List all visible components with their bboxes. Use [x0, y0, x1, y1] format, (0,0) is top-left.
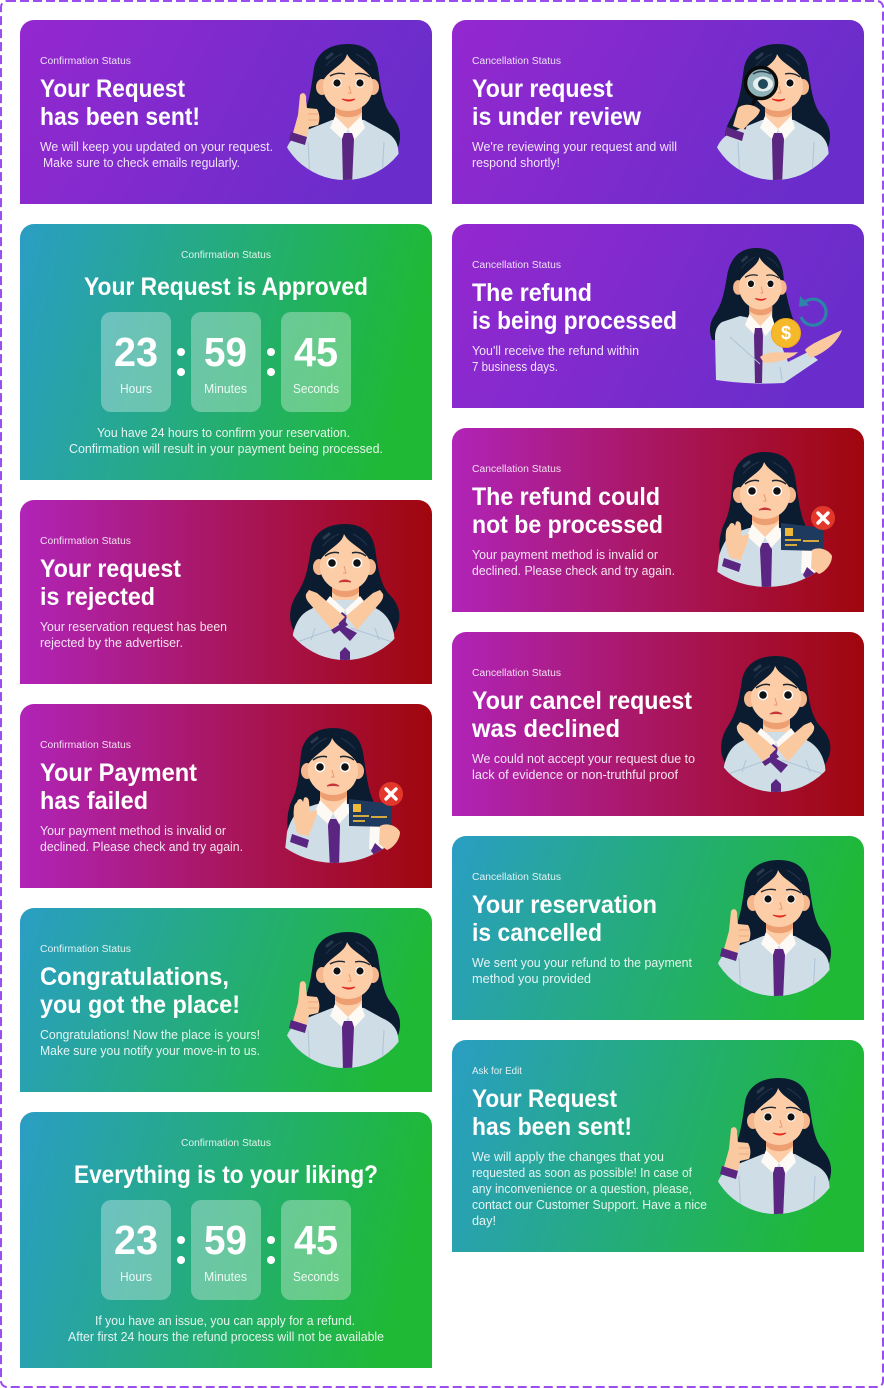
card: ask for edit: requested as soon as possible! In case of: [472, 1166, 692, 1180]
card: request rejected: rejected by the advertiser.: [40, 636, 183, 650]
card: request sent: has been sent!: [40, 103, 200, 131]
card: request approved: Minutes: [204, 382, 247, 396]
card: request rejected: Your reservation request has been: [40, 620, 227, 634]
card: request rejected: is rejected: [40, 583, 155, 611]
card: reservation cancelled: method you provided: [472, 972, 591, 986]
card: under review: Your request: [472, 75, 614, 103]
card: refund processing: You'll receive the refund within: [472, 344, 639, 358]
card: request approved: 23: [114, 329, 158, 375]
card: cancel declined: We could not accept your request due to: [472, 752, 695, 766]
card: request sent: Confirmation Status: [40, 56, 131, 67]
card: request approved: Seconds: [293, 382, 339, 396]
card: request approved: 59: [204, 329, 247, 375]
card: request sent: [20, 20, 432, 204]
card: congratulations: Make sure you notify your move-in to us.: [40, 1044, 260, 1058]
card: payment failed: Your payment method is invalid or: [40, 824, 226, 838]
card: cancel declined: Cancellation Status: [472, 668, 561, 679]
card: reservation cancelled: is cancelled: [472, 919, 602, 947]
card: congratulations: Congratulations! Now the place is yours!: [40, 1028, 260, 1042]
card: everything to your liking: [20, 1112, 432, 1368]
card: congratulations: you got the place!: [40, 991, 240, 1019]
card: everything to your liking: Confirmation Status: [181, 1138, 271, 1149]
card: refund processing: 7 business days.: [472, 360, 558, 374]
card: payment failed: Confirmation Status: [40, 740, 131, 751]
card: ask for edit: We will apply the changes that you: [472, 1150, 664, 1164]
card: reservation cancelled: [452, 836, 864, 1020]
card: request approved: Confirmation will result in your payment being processed.: [69, 442, 383, 456]
card: under review: We're reviewing your request and will: [472, 140, 677, 154]
card: ask for edit: has been sent!: [472, 1113, 632, 1141]
card: refund not processed: Your payment method is invalid or: [472, 548, 658, 562]
card: request sent: We will keep you updated on your request.: [40, 140, 273, 154]
card: everything to your liking: Everything is to your liking?: [74, 1161, 378, 1189]
card: everything to your liking: Hours: [120, 1270, 152, 1284]
card: cancel declined: [452, 632, 864, 816]
card: request approved: Your Request is Approved: [84, 273, 368, 301]
card: refund processing: [452, 224, 864, 408]
card: request sent: Your Request: [40, 75, 186, 103]
card: cancel declined: lack of evidence or non-truthful proof: [472, 768, 679, 782]
card: everything to your liking: If you have an issue, you can apply for a refund.: [95, 1314, 355, 1328]
card: everything to your liking: Seconds: [293, 1270, 339, 1284]
card: request approved: Confirmation Status: [181, 250, 271, 261]
card: cancel declined: was declined: [471, 715, 620, 743]
card: reservation cancelled: Cancellation Status: [472, 872, 561, 883]
card: request approved: You have 24 hours to confirm your reservation.: [97, 426, 350, 440]
card: ask for edit: contact our Customer Support. Have a nice: [472, 1198, 707, 1212]
card: under review: respond shortly!: [472, 156, 560, 170]
card: everything to your liking: 45: [294, 1217, 338, 1263]
card: congratulations: Confirmation Status: [40, 944, 131, 955]
card: payment failed: has failed: [40, 787, 148, 815]
card: payment failed: declined. Please check and try again.: [40, 840, 243, 854]
card: refund processing: Cancellation Status: [472, 260, 561, 271]
card: payment failed: [20, 704, 432, 888]
card: request approved: [20, 224, 432, 480]
card: under review: [452, 20, 864, 204]
card: everything to your liking: 23: [114, 1217, 158, 1263]
card: ask for edit: Your Request: [472, 1085, 618, 1113]
card: ask for edit: Ask for Edit: [472, 1066, 522, 1077]
card: everything to your liking: Minutes: [204, 1270, 247, 1284]
card: request approved: 45: [294, 329, 338, 375]
card: refund not processed: [452, 428, 864, 612]
card: everything to your liking: After first 24 hours the refund process will not be available: [68, 1330, 384, 1344]
card: ask for edit: any inconvenience or a question, please,: [472, 1182, 692, 1196]
card: cancel declined: Your cancel request: [472, 687, 693, 715]
card: refund processing: The refund: [472, 279, 592, 307]
card: everything to your liking: 59: [204, 1217, 247, 1263]
card: refund processing: is being processed: [472, 307, 677, 335]
card: request rejected: Your request: [40, 555, 182, 583]
card: under review: Cancellation Status: [472, 56, 561, 67]
card: request rejected: Confirmation Status: [40, 536, 131, 547]
card: reservation cancelled: We sent you your refund to the payment: [472, 956, 693, 970]
card: refund not processed: not be processed: [472, 511, 663, 539]
card: request sent: Make sure to check emails regularly.: [43, 156, 240, 170]
card: congratulations: Congratulations,: [40, 963, 229, 991]
card: under review: is under review: [472, 103, 642, 131]
card: refund not processed: Cancellation Status: [472, 464, 561, 475]
card: reservation cancelled: Your reservation: [472, 891, 657, 919]
card: ask for edit: day!: [472, 1214, 496, 1228]
card: request rejected: [20, 500, 432, 684]
card: request approved: Hours: [120, 382, 152, 396]
card: ask for edit: [452, 1040, 864, 1252]
card: congratulations: [20, 908, 432, 1092]
card: refund not processed: declined. Please check and try again.: [472, 564, 675, 578]
card: refund not processed: The refund could: [472, 483, 660, 511]
card: payment failed: Your Payment: [40, 759, 198, 787]
